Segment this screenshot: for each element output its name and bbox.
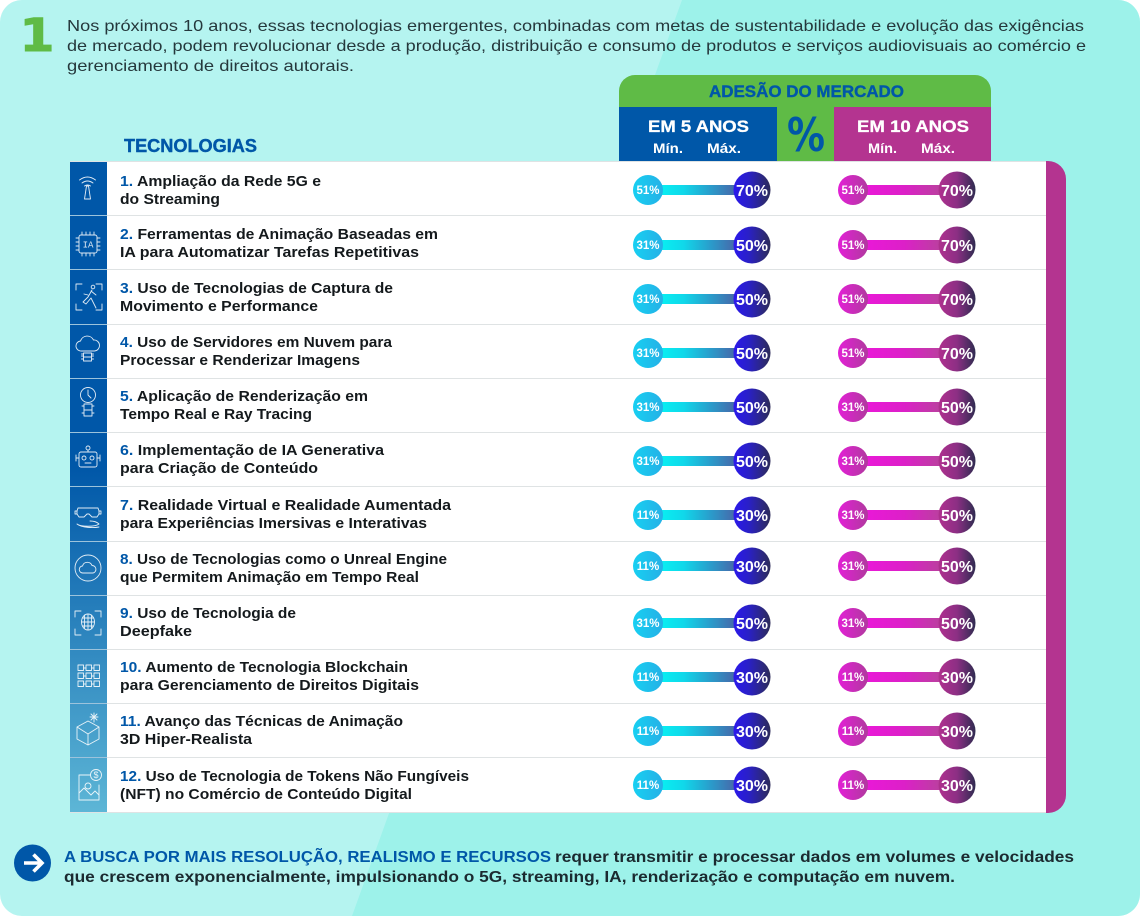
range 10 years row 9: 31% (841, 618, 865, 630)
range 5 years row 10 (633, 658, 770, 696)
technology label 3: 3. Uso de Tecnologias de Captura de (120, 280, 393, 297)
range 10 years row 7: 31% (841, 510, 865, 522)
technology label 4 (120, 334, 393, 369)
range 5 years row 10: 30% (736, 670, 768, 687)
range 10 years row 9: 50% (941, 616, 973, 633)
intro text (67, 18, 1086, 75)
range 10 years row 5: 50% (941, 400, 973, 417)
range 5 years row 9: 31% (636, 618, 660, 630)
range 5 years row 5: 31% (636, 402, 660, 414)
range 10 years row 1: 51% (841, 185, 865, 197)
range 5 years row 8: 11% (637, 561, 659, 573)
icon: blockchain (78, 665, 100, 686)
technology label 2: 2. Ferramentas de Animação Baseadas em (120, 226, 438, 243)
intro text: gerenciamento de direitos autorais. (67, 58, 354, 75)
icon: clock server (80, 388, 96, 416)
range 10 years row 6: 31% (841, 456, 865, 468)
row 11 (120, 712, 976, 750)
range 10 years row 9 (838, 604, 976, 642)
header: em 5 anos: Mín. (653, 141, 683, 156)
side bar (1040, 161, 1066, 813)
technology label 2 (120, 226, 438, 261)
range 10 years row 8: 31% (841, 561, 865, 573)
row 6 (120, 442, 976, 480)
range 10 years row 3: 70% (941, 292, 973, 309)
range 10 years row 8: 50% (941, 559, 973, 576)
icon: cloud in circle (75, 555, 101, 581)
range 10 years row 5 (838, 388, 976, 426)
range 5 years row 6: 31% (636, 456, 660, 468)
technology label 12 (120, 768, 469, 803)
range 5 years row 11: 11% (637, 726, 659, 738)
icon: AI chip (76, 232, 100, 256)
range 10 years row 2: 51% (841, 240, 865, 252)
technology label 11 (120, 713, 403, 748)
technology label 10: para Gerenciamento de Direitos Digitais (120, 677, 419, 694)
range 10 years row 11: 11% (842, 726, 864, 738)
range 5 years row 1 (633, 172, 770, 208)
technology label 5 (120, 388, 368, 423)
row 1 (120, 172, 976, 208)
icon: NFT image: $ (93, 770, 99, 780)
range 5 years row 2 (633, 226, 770, 264)
technology label 11: 3D Hiper-Realista (120, 731, 253, 748)
icon: motion capture (76, 284, 102, 310)
technology label 4: Processar e Renderizar Imagens (120, 352, 360, 369)
footer callout: requer transmitir e processar dados em volumes e velocidades (555, 849, 1074, 866)
row 7 (120, 496, 976, 534)
range 10 years row 1: 70% (941, 183, 973, 200)
range 5 years row 3 (633, 280, 770, 318)
range 10 years row 11: 30% (941, 724, 973, 741)
range 10 years row 3 (838, 280, 976, 318)
range 10 years row 2: 70% (941, 238, 973, 255)
technology label 8: que Permitem Animação em Tempo Real (120, 569, 419, 586)
range 5 years row 11: 30% (736, 724, 768, 741)
technology label 6: para Criação de Conteúdo (120, 460, 318, 477)
footer callout (64, 848, 1074, 886)
technology label 6: 6. Implementação de IA Generativa (120, 442, 385, 459)
header: em 10 anos (834, 107, 991, 161)
technology label 11: 11. Avanço das Técnicas de Animação (120, 713, 403, 730)
header: adesão do mercado (619, 75, 991, 162)
row 4 (120, 334, 976, 372)
range 5 years row 4: 31% (636, 348, 660, 360)
icon: AI chip: IA (83, 240, 94, 250)
range 10 years row 7: 50% (941, 508, 973, 525)
icon: VR headset (75, 508, 101, 528)
range 10 years row 12: 11% (842, 780, 864, 792)
range 5 years row 5: 50% (736, 400, 768, 417)
technology label 4: 4. Uso de Servidores em Nuvem para (120, 334, 393, 351)
technology label 1 (120, 173, 321, 208)
range 5 years row 1: 51% (636, 185, 660, 197)
row 2 (120, 226, 976, 264)
range 5 years row 6: 50% (736, 454, 768, 471)
header: em 10 anos: Mín. (868, 141, 897, 156)
section number: 1 (20, 9, 54, 62)
range 5 years row 4 (633, 334, 770, 372)
range 5 years row 7 (633, 496, 770, 534)
technology label 12: 12. Uso de Tecnologia de Tokens Não Fungíveis (120, 768, 469, 785)
table panel (70, 161, 1046, 813)
technology label 10: 10. Aumento de Tecnologia Blockchain (120, 659, 408, 676)
range 10 years row 6 (838, 442, 976, 480)
range 10 years row 1 (838, 172, 976, 208)
range 10 years row 12: 30% (941, 778, 973, 795)
footer callout: A BUSCA POR MAIS RESOLUÇÃO, REALISMO E RECURSOS (64, 848, 551, 866)
range 10 years row 4: 51% (841, 348, 865, 360)
range 5 years row 12 (633, 766, 770, 804)
range 10 years row 10 (838, 658, 976, 696)
header: em 5 anos: EM 5 ANOS (648, 117, 749, 136)
header: em 5 anos (619, 107, 777, 161)
technology label 9: 9. Uso de Tecnologia de (120, 605, 296, 622)
intro text: de mercado, podem revolucionar desde a produção, distribuição e consumo de produtos e serviços audiovisuais ao comércio e (67, 38, 1086, 55)
icon: NFT image (79, 770, 102, 800)
range 5 years row 2: 50% (736, 238, 768, 255)
row 9 (120, 604, 976, 642)
technology label 12: (NFT) no Comércio de Conteúdo Digital (120, 786, 412, 803)
range 5 years row 11 (633, 712, 770, 750)
technology label 10 (120, 659, 419, 694)
icon: 3D cube (77, 713, 99, 745)
range 5 years row 8: 30% (736, 559, 768, 576)
range 10 years row 6: 50% (941, 454, 973, 471)
range 10 years row 7 (838, 496, 976, 534)
row 12 (120, 766, 976, 804)
technology label 8 (120, 551, 447, 586)
intro text: Nos próximos 10 anos, essas tecnologias emergentes, combinadas com metas de sustentabilidade e evolução das exigências (67, 18, 1084, 35)
range 10 years row 5: 31% (841, 402, 865, 414)
range 5 years row 12: 11% (637, 780, 659, 792)
technology label 6 (120, 442, 385, 477)
technology label 8: 8. Uso de Tecnologias como o Unreal Engine (120, 551, 447, 568)
heading: tecnologias: TECNOLOGIAS (124, 136, 257, 156)
row 3 (120, 280, 976, 318)
technology label 9 (120, 605, 296, 640)
range 5 years row 9: 50% (736, 616, 768, 633)
technology label 7 (120, 497, 452, 532)
icon: face scan globe (75, 611, 101, 635)
technology label 3 (120, 280, 393, 315)
range 10 years row 3: 51% (841, 294, 865, 306)
range 10 years row 12 (838, 766, 976, 804)
range 5 years row 10: 11% (637, 672, 659, 684)
footer callout: que crescem exponencialmente, impulsionando o 5G, streaming, IA, renderização e computação em nuvem. (64, 869, 955, 886)
range 10 years row 10: 11% (842, 672, 864, 684)
technology label 7: 7. Realidade Virtual e Realidade Aumentada (120, 497, 452, 514)
range 10 years row 8 (838, 548, 976, 584)
range 10 years row 4: 70% (941, 346, 973, 363)
range 5 years row 7: 11% (637, 510, 659, 522)
header: em 5 anos: Máx. (707, 141, 741, 156)
header: em 10 anos: Máx. (921, 141, 955, 156)
header: adesão do mercado: ADESÃO DO MERCADO (709, 81, 904, 101)
range 10 years row 2 (838, 226, 976, 264)
range 5 years row 6 (633, 442, 770, 480)
technology label 5: 5. Aplicação de Renderização em (120, 388, 368, 405)
range 5 years row 8 (633, 548, 770, 584)
range 5 years row 4: 50% (736, 346, 768, 363)
row 5 (120, 388, 976, 426)
range 10 years row 11 (838, 712, 976, 750)
range 5 years row 7: 30% (736, 508, 768, 525)
technology label 5: Tempo Real e Ray Tracing (120, 406, 312, 423)
technology label 3: Movimento e Performance (120, 298, 318, 315)
range 10 years row 10: 30% (941, 670, 973, 687)
header: em 10 anos: EM 10 ANOS (857, 117, 969, 136)
row 8 (120, 548, 976, 586)
row 10 (120, 658, 976, 696)
range 5 years row 3: 31% (636, 294, 660, 306)
range 5 years row 3: 50% (736, 292, 768, 309)
range 5 years row 12: 30% (736, 778, 768, 795)
icon: robot (76, 446, 100, 467)
range 10 years row 4 (838, 334, 976, 372)
icon: antenna (80, 177, 96, 199)
range 5 years row 9 (633, 604, 770, 642)
technology label 2: IA para Automatizar Tarefas Repetitivas (120, 244, 419, 261)
technology label 7: para Experiências Imersivas e Interativas (120, 515, 427, 532)
icon: cloud server (76, 336, 100, 361)
range 5 years row 5 (633, 388, 770, 426)
icon: arrow in circle (14, 844, 51, 882)
range 5 years row 1: 70% (736, 183, 768, 200)
technology label 1: 1. Ampliação da Rede 5G e (120, 173, 321, 190)
technology label 1: do Streaming (120, 191, 220, 208)
percent symbol: % (787, 108, 825, 162)
technology label 9: Deepfake (120, 623, 192, 640)
range 5 years row 2: 31% (636, 240, 660, 252)
